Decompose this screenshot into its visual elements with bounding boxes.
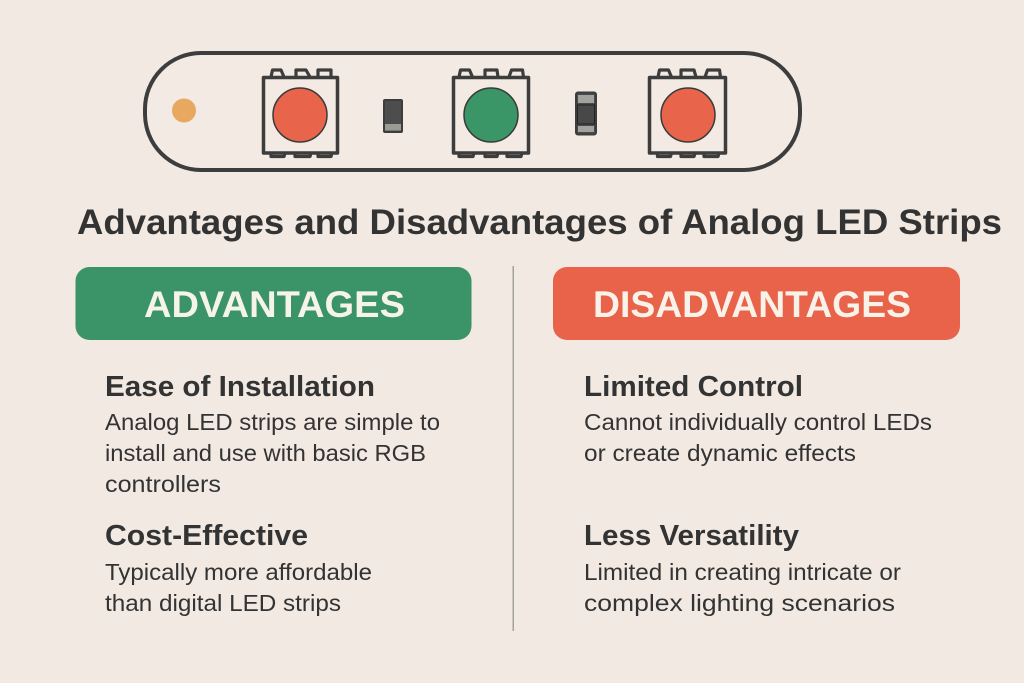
item: ease of installation: controllers: [105, 471, 221, 497]
LED chip: red left: [264, 70, 338, 156]
strip outline: [145, 53, 800, 170]
heading: advantages banner: [76, 267, 472, 340]
LED chip: red right: [650, 70, 726, 156]
item: limited control: Cannot individually control LEDs: [584, 409, 932, 435]
heading: disadvantages banner: DISADVANTAGES: [593, 284, 911, 325]
item: less versatility: complex lighting scenarios: [584, 590, 895, 616]
icon: orange indicator dot: [172, 98, 196, 122]
item: cost-effective: Cost-Effective: [105, 520, 308, 552]
center divider: [512, 266, 514, 631]
illustration: LED strip: [145, 53, 800, 170]
item: ease of installation: install and use with basic RGB: [105, 440, 426, 466]
title: Advantages and Disadvantages of Analog LED Strips: [77, 203, 1002, 242]
item: ease of installation: [105, 371, 440, 497]
resistor: left: [384, 100, 402, 132]
item: cost-effective: than digital LED strips: [105, 590, 341, 616]
heading: disadvantages banner: [553, 267, 960, 340]
panel: disadvantages: [553, 267, 960, 616]
LED chip: green center: [454, 70, 528, 156]
item: cost-effective: [105, 520, 372, 616]
item: less versatility: Less Versatility: [584, 520, 799, 552]
item: less versatility: Limited in creating intricate or: [584, 559, 901, 585]
item: ease of installation: Ease of Installation: [105, 371, 375, 403]
resistor: right: [576, 92, 596, 134]
item: limited control: [584, 371, 932, 466]
item: cost-effective: Typically more affordable: [105, 559, 372, 585]
item: less versatility: [584, 520, 901, 616]
panel: advantages: [76, 267, 472, 616]
item: limited control: Limited Control: [584, 371, 803, 403]
item: limited control: or create dynamic effects: [584, 440, 856, 466]
item: ease of installation: Analog LED strips are simple to: [105, 409, 440, 435]
heading: advantages banner: ADVANTAGES: [144, 284, 405, 325]
